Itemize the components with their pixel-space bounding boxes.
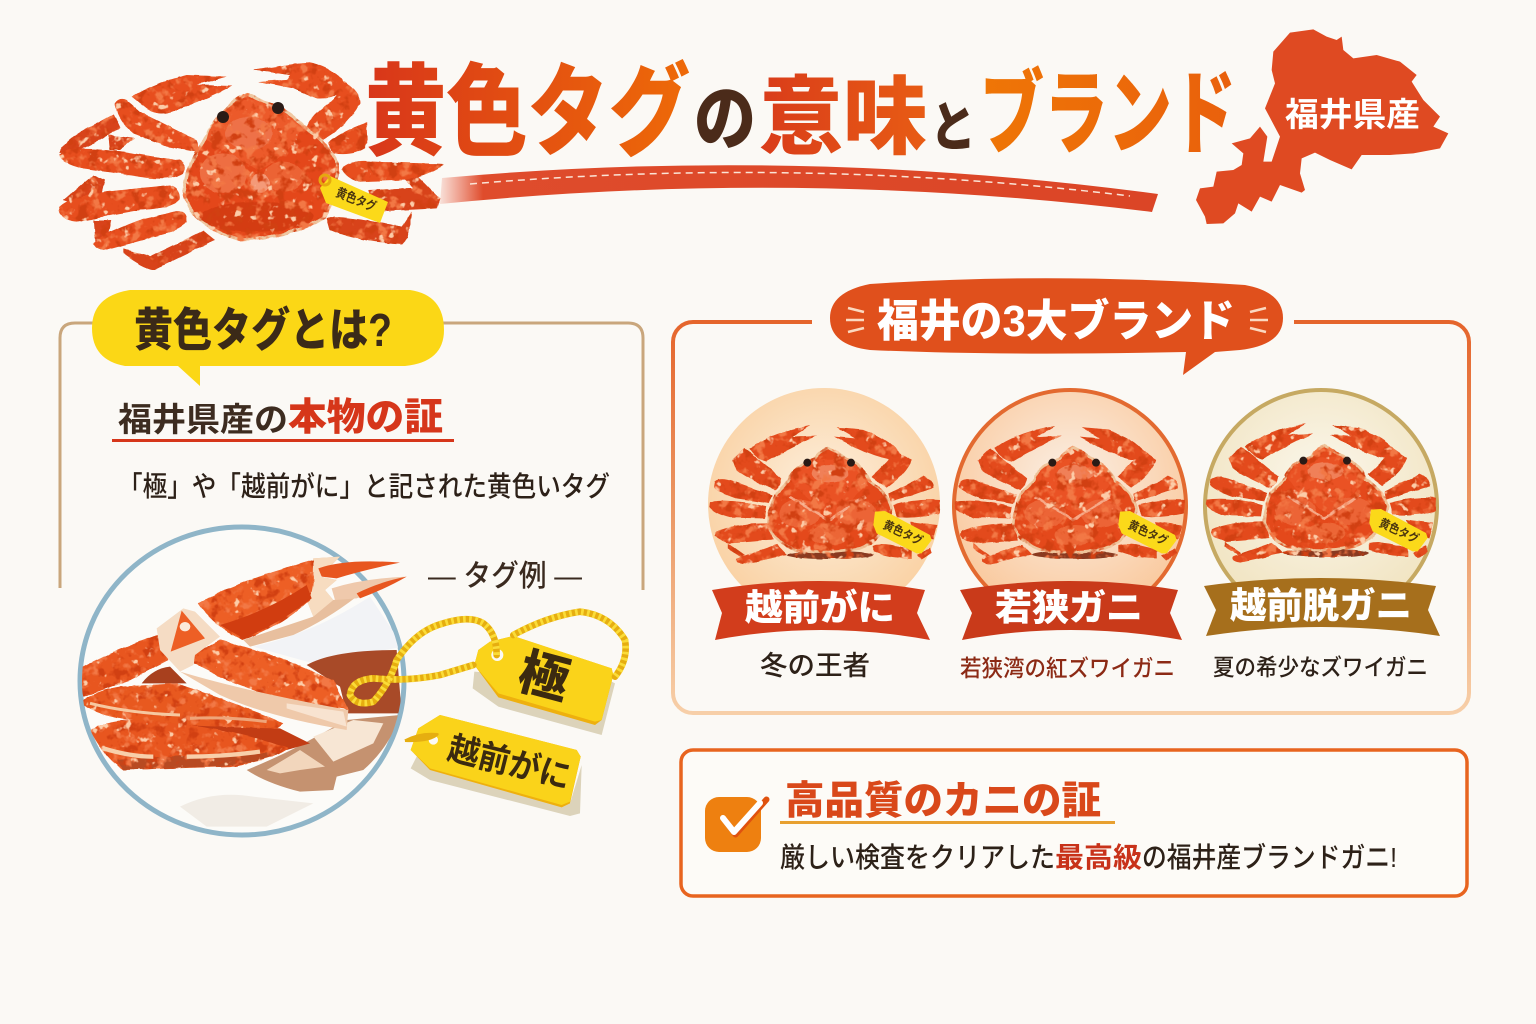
- upper claw: [243, 557, 407, 647]
- title swoosh ribbon: [440, 165, 1158, 212]
- callout heading: 高品質のカニの証: [785, 780, 1101, 823]
- brand: echizen molting crab: 夏の希少なズワイガニ: [1213, 654, 1428, 680]
- Fukui prefecture map: [1196, 29, 1448, 224]
- callout text: 最高級: [1055, 842, 1142, 873]
- title: の: [694, 80, 756, 160]
- tag: goku: [350, 612, 626, 735]
- title: ブランド: [980, 64, 1236, 166]
- subheading: 福井県産の: [118, 401, 288, 438]
- tag: echizen gani: 越前がに: [444, 729, 574, 797]
- subheading: 本物の証: [288, 397, 443, 439]
- callout text: の福井産ブランドガニ!: [1142, 842, 1397, 873]
- panel: what is the yellow tag: [60, 290, 643, 590]
- brand: wakasa gani: 若狭ガニ: [995, 587, 1143, 628]
- hero crab eyes: [217, 102, 284, 123]
- panel: three brands: [673, 278, 1469, 713]
- brand: echizen gani: 冬の王者: [760, 651, 870, 681]
- panel frame: [60, 323, 643, 590]
- brand: echizen molting crab: [1204, 390, 1440, 680]
- brands heading banner: 福井の3大ブランド: [877, 296, 1235, 346]
- brand: wakasa gani: 若狭湾の紅ズワイガニ: [960, 655, 1175, 681]
- speech bubble heading: 黄色タグとは?: [134, 304, 392, 356]
- Fukui prefecture map: 福井県産: [1285, 96, 1420, 133]
- panel frame: [673, 322, 1469, 713]
- brand: wakasa gani: [954, 390, 1186, 681]
- icon: check mark: [705, 797, 766, 852]
- tag: echizen gani: [405, 715, 582, 816]
- callout text: 厳しい検査をクリアした: [780, 842, 1055, 873]
- panel: quality callout: [681, 750, 1467, 896]
- hero crab illustration: [58, 63, 443, 270]
- infographic canvas: [58, 29, 1471, 898]
- title: 黄色タグ: [365, 57, 690, 169]
- brand: echizen gani: [708, 388, 940, 681]
- title: と: [930, 98, 976, 158]
- brand: wakasa gani: 黄色タグ: [1126, 517, 1170, 548]
- brand: echizen molting crab: 黄色タグ: [1377, 515, 1421, 546]
- title: 意味: [759, 70, 927, 166]
- hero crab yellow tag: [320, 175, 388, 223]
- speech bubble heading: [92, 290, 444, 386]
- tag: goku: 極: [513, 643, 575, 711]
- brands heading banner: [830, 278, 1283, 375]
- description: 「極」や「越前がに」と記された黄色いタグ: [118, 471, 610, 502]
- brand: echizen molting crab: 越前脱ガニ: [1230, 585, 1412, 626]
- circular crab leg illustration: [77, 527, 407, 835]
- title: [365, 57, 1236, 169]
- hero crab yellow tag: 黄色タグ: [334, 185, 378, 214]
- brand: echizen gani: 黄色タグ: [881, 517, 925, 548]
- callout text: [780, 842, 1397, 873]
- brand: echizen gani: 越前がに: [745, 587, 895, 628]
- subheading: [112, 397, 454, 442]
- label: tag example: — タグ例 —: [428, 560, 582, 593]
